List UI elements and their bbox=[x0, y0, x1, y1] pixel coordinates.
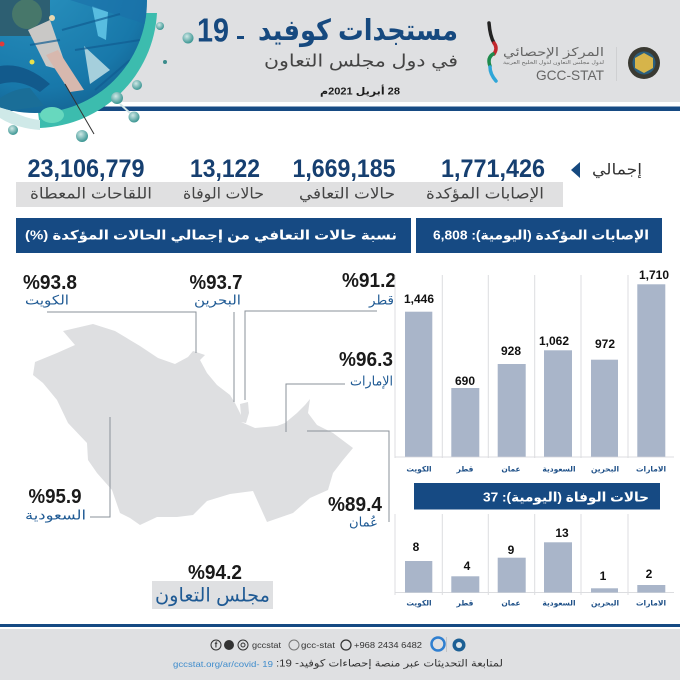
stat: confirmed: الإصابات المؤكدة bbox=[426, 186, 544, 202]
bar chart: daily deaths: السعودية bbox=[542, 598, 576, 608]
bar chart: daily confirmed cases: 928 bbox=[501, 344, 521, 358]
map label: Bahrain: %93.7 bbox=[190, 272, 242, 294]
map label: Oman bbox=[328, 494, 383, 530]
bar chart: daily confirmed cases: الامارات bbox=[636, 464, 666, 474]
stat: vaccines bbox=[28, 155, 152, 202]
bar chart: daily confirmed cases: الكويت bbox=[406, 464, 432, 474]
bar chart: daily deaths: الكويت bbox=[406, 598, 432, 608]
map label: UAE bbox=[339, 349, 393, 390]
footer link line bbox=[173, 658, 503, 670]
map leader lines bbox=[47, 311, 389, 522]
stat: deaths bbox=[183, 155, 264, 202]
bar chart: daily confirmed cases: 1,062 bbox=[539, 334, 569, 348]
bar chart: daily confirmed cases: 972 bbox=[595, 337, 615, 351]
footer contact row: f bbox=[215, 640, 218, 650]
bar chart: daily confirmed cases: 1,446 bbox=[404, 292, 434, 306]
map label: Oman: عُمان bbox=[349, 514, 378, 530]
stat: confirmed: 1,771,426 bbox=[441, 155, 545, 183]
heading: daily confirmed: الإصابات المؤكدة (اليومية): 6,808 bbox=[433, 228, 649, 242]
map label: Saudi Arabia: السعودية bbox=[25, 508, 86, 524]
bar chart: daily deaths: قطر bbox=[456, 598, 474, 608]
footer link line: لمتابعة التحديثات عبر منصة إحصاءات كوفيد- 19: bbox=[276, 658, 503, 670]
bar chart: daily deaths: البحرين bbox=[591, 598, 619, 608]
map label: Bahrain bbox=[190, 272, 242, 308]
heading: daily deaths: حالات الوفاة (اليومية): 37 bbox=[483, 490, 649, 504]
bar chart: daily confirmed cases: عمان bbox=[501, 464, 521, 474]
map label: Kuwait: %93.8 bbox=[23, 272, 77, 294]
bar chart: daily deaths: 9 bbox=[508, 543, 515, 557]
map label: Oman: %89.4 bbox=[328, 494, 383, 516]
stat: recovered: حالات التعافي bbox=[299, 186, 395, 204]
title: مستجدات كوفيد bbox=[258, 15, 458, 47]
bar chart: daily deaths bbox=[395, 514, 674, 608]
map label: Qatar bbox=[342, 270, 396, 308]
logo: GCC-STAT wordmark: المركز الإحصائي bbox=[503, 45, 604, 60]
heading: recovery rate bbox=[16, 218, 411, 253]
footer contact row bbox=[211, 637, 466, 652]
logo: GCC-STAT wordmark: GCC-STAT bbox=[536, 67, 604, 83]
footer contact row: +968 2434 6482 bbox=[354, 640, 422, 650]
map label: Qatar: %91.2 bbox=[342, 270, 396, 292]
bar chart: daily deaths: عمان bbox=[501, 598, 521, 608]
title bbox=[197, 12, 458, 48]
map label: Saudi Arabia: %95.9 bbox=[28, 486, 82, 508]
map label: UAE: %96.3 bbox=[339, 349, 393, 371]
stat: vaccines: اللقاحات المعطاة bbox=[30, 186, 152, 202]
stat: confirmed bbox=[426, 155, 545, 202]
heading: daily confirmed bbox=[416, 218, 662, 253]
map label: Bahrain: البحرين bbox=[194, 292, 241, 308]
footer band bbox=[0, 624, 680, 680]
bar chart: daily deaths: 4 bbox=[464, 559, 471, 573]
GCC total callout bbox=[152, 562, 273, 609]
stat: deaths: 13,122 bbox=[190, 155, 260, 183]
stat: recovered bbox=[292, 155, 396, 204]
GCC total callout: مجلس التعاون bbox=[155, 586, 270, 606]
heading: recovery rate: نسبة حالات التعافي من إجمالي الحالات المؤكدة (%) bbox=[25, 228, 397, 242]
stat: vaccines: 23,106,779 bbox=[28, 155, 144, 183]
bar chart: daily confirmed cases: 690 bbox=[455, 374, 475, 388]
totals label bbox=[571, 162, 642, 180]
stat: recovered: 1,669,185 bbox=[292, 155, 396, 183]
map of GCC countries bbox=[33, 324, 353, 525]
heading: daily deaths bbox=[414, 483, 660, 510]
date: 28 أبريل 2021م bbox=[320, 84, 400, 98]
footer contact row: gcc-stat bbox=[301, 640, 336, 650]
map label: Kuwait bbox=[23, 272, 77, 308]
subtitle: في دول مجلس التعاون bbox=[264, 52, 458, 72]
stat: deaths: حالات الوفاة bbox=[183, 186, 264, 202]
bar chart: daily confirmed cases: البحرين bbox=[591, 464, 619, 474]
totals label: إجمالي bbox=[592, 162, 642, 180]
bar chart: daily confirmed cases: السعودية bbox=[542, 464, 576, 474]
map label: UAE: الإمارات bbox=[350, 374, 393, 390]
logo: GCC-STAT ribbon bbox=[489, 23, 496, 81]
bar chart: daily deaths: الامارات bbox=[636, 598, 666, 608]
totals grey band bbox=[16, 182, 563, 207]
map label: Saudi Arabia bbox=[25, 486, 86, 524]
bar chart: daily deaths: 13 bbox=[555, 526, 569, 540]
map label: Qatar: قطر bbox=[368, 292, 394, 308]
header illustration: globe with needle bbox=[0, 0, 194, 142]
title: 19 bbox=[197, 12, 229, 48]
logo: GCC-STAT wordmark: لدول مجلس التعاون لدول الخليج العربية bbox=[503, 60, 605, 66]
footer contact row: gccstat bbox=[252, 640, 282, 650]
logo: GCC emblem bbox=[616, 47, 660, 81]
bar chart: daily deaths: 2 bbox=[646, 567, 653, 581]
GCC total callout: %94.2 bbox=[188, 562, 242, 584]
bar chart: daily confirmed cases bbox=[395, 268, 674, 474]
footer link line: gccstat.org/ar/covid- 19 bbox=[173, 659, 273, 669]
map label: Kuwait: الكويت bbox=[25, 292, 69, 308]
bar chart: daily deaths: 1 bbox=[600, 569, 607, 583]
header band bbox=[0, 0, 680, 111]
logo: GCC-STAT wordmark bbox=[503, 45, 605, 83]
bar chart: daily confirmed cases: 1,710 bbox=[639, 268, 669, 282]
bar chart: daily deaths: 8 bbox=[413, 540, 420, 554]
bar chart: daily confirmed cases: قطر bbox=[456, 464, 474, 474]
